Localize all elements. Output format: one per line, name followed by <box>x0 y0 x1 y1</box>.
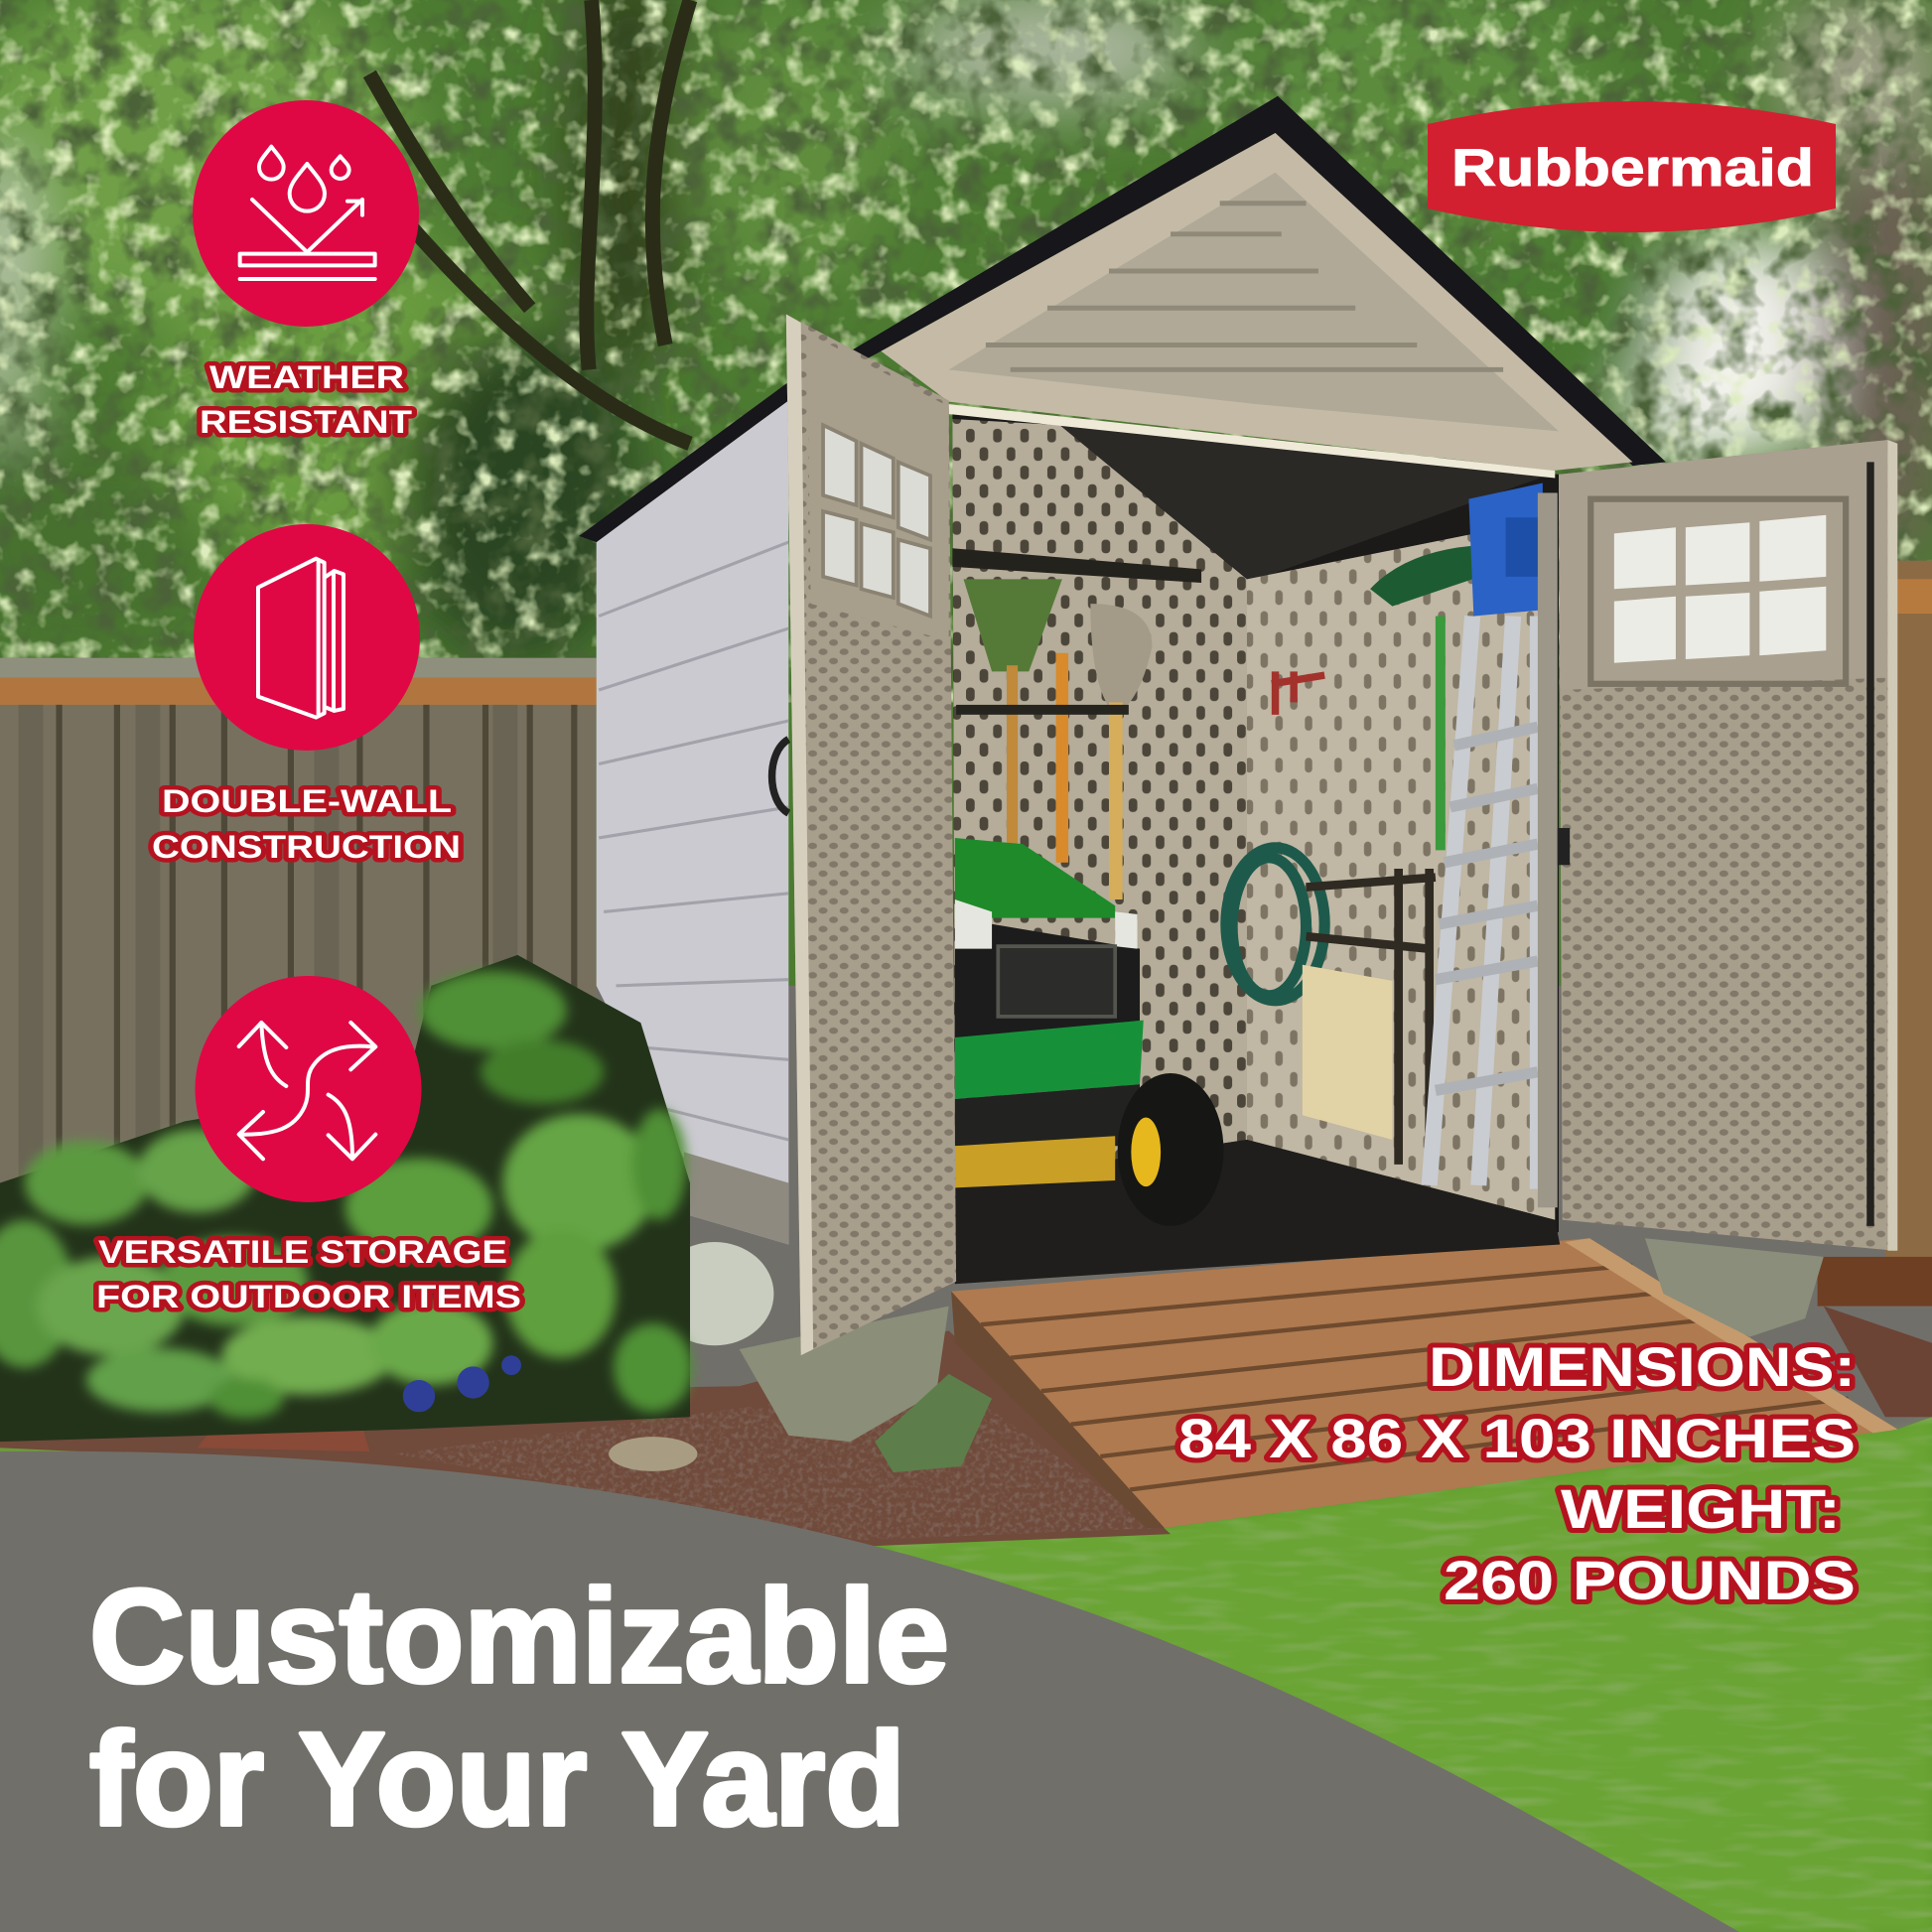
wooden ramp <box>951 1238 1897 1528</box>
ceiling <box>1059 425 1550 582</box>
open door right <box>1558 440 1897 1251</box>
label <box>200 359 413 440</box>
icon: four curved arrows <box>239 1023 375 1159</box>
icon circle <box>194 524 420 751</box>
shelf bar <box>952 548 1201 583</box>
shed left side wall <box>597 400 788 1245</box>
green broom <box>1370 546 1472 850</box>
garden plants <box>0 955 692 1442</box>
logo: Rubbermaid: Rubbermaid <box>1451 139 1814 198</box>
wall hook with red tips <box>1272 671 1324 715</box>
dimensions and weight callout: 260 POUNDS <box>1444 1549 1856 1611</box>
label: VERSATILE STORAGE <box>98 1234 507 1270</box>
garden hose <box>1226 848 1324 1001</box>
feature: versatile storage <box>96 976 521 1314</box>
riding mower <box>955 838 1223 1226</box>
urn planter left <box>655 1242 949 1442</box>
label: FOR OUTDOOR ITEMS <box>96 1279 521 1314</box>
grey curved banner <box>0 1451 1739 1932</box>
dimensions and weight callout: WEIGHT: <box>1561 1477 1841 1540</box>
shed interior <box>952 413 1560 1284</box>
mulch bed <box>0 1307 1932 1547</box>
step ladder <box>1430 483 1543 1189</box>
lawn <box>0 1417 1932 1932</box>
interior right wall <box>1247 517 1555 1220</box>
right door window panes <box>1614 515 1826 663</box>
label: RESISTANT <box>200 404 413 440</box>
left door window panes <box>823 425 930 617</box>
label: WEATHER <box>209 359 404 395</box>
feature: weather resistant <box>193 100 419 440</box>
headline <box>89 1563 949 1854</box>
icon circle <box>193 100 419 327</box>
dimensions and weight callout: DIMENSIONS: <box>1429 1335 1856 1398</box>
logo: Rubbermaid <box>1428 101 1836 232</box>
label <box>96 1234 521 1314</box>
hanging tools <box>956 579 1152 899</box>
wooden fence right <box>1818 561 1932 1307</box>
icon: double wall panel <box>258 559 344 718</box>
shed gable and roof <box>579 96 1666 542</box>
folding chair <box>1303 869 1436 1171</box>
feature: double-wall construction <box>152 524 461 865</box>
label: DOUBLE-WALL <box>162 783 452 819</box>
shed floor <box>955 1140 1560 1284</box>
icon: water drops bouncing off surface <box>240 147 375 279</box>
background: tree canopy and sky <box>0 0 1932 986</box>
label <box>152 783 461 865</box>
interior back wall <box>952 419 1247 1182</box>
headline: Customizable <box>89 1563 949 1711</box>
flower pot foliage <box>875 1374 992 1472</box>
dimensions and weight callout: 84 X 86 X 103 INCHES <box>1178 1407 1856 1469</box>
open door left <box>786 314 956 1355</box>
icon circle <box>195 976 421 1202</box>
headline: for Your Yard <box>89 1706 905 1854</box>
label: CONSTRUCTION <box>152 829 461 865</box>
dimensions and weight callout <box>1178 1335 1856 1611</box>
urn planter right <box>1645 1238 1824 1337</box>
wooden fence left <box>0 658 597 1187</box>
